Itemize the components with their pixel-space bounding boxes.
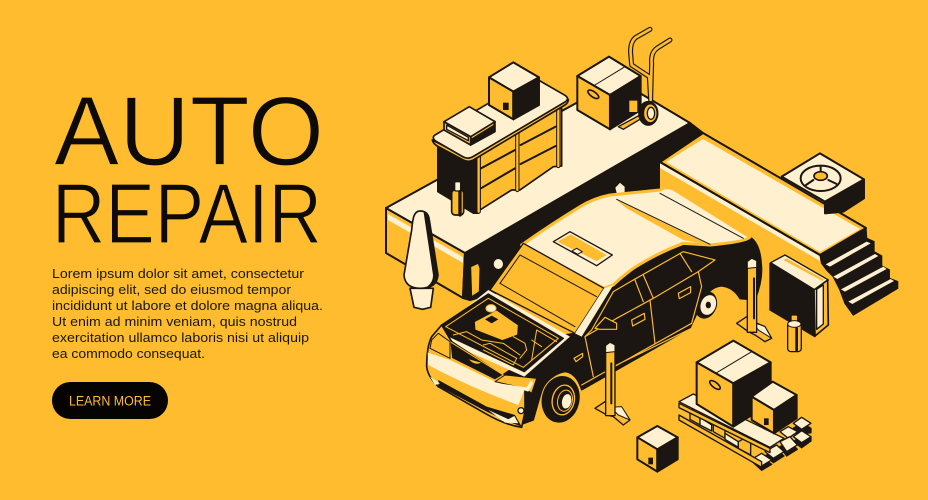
tree xyxy=(404,211,438,309)
body text: Ut enim ad minim veniam, quis nostrud xyxy=(52,314,297,329)
stairs xyxy=(820,228,898,315)
tool cabinet xyxy=(432,62,568,215)
body text: adipiscing elit, sed do eiusmod tempor xyxy=(52,282,292,297)
main workshop platform xyxy=(386,80,720,300)
side windows and door lines xyxy=(574,252,715,385)
sunroof xyxy=(553,232,612,266)
rear spoiler xyxy=(617,193,743,245)
roof xyxy=(522,188,750,288)
button: learn more: LEARN MORE xyxy=(69,394,151,408)
lower right platform xyxy=(660,133,866,313)
body text: Lorem ipsum dolor sit amet, consectetur xyxy=(52,266,305,281)
front fascia xyxy=(427,325,537,427)
small box xyxy=(752,382,797,433)
title: REPAIR xyxy=(52,167,322,262)
title xyxy=(52,76,324,262)
pallet xyxy=(679,394,811,470)
locker cabinet xyxy=(770,255,828,337)
gas cylinder xyxy=(788,315,801,352)
title: AUTO xyxy=(54,76,324,186)
engine bay xyxy=(438,290,570,377)
windshield xyxy=(490,243,604,333)
cream pillar xyxy=(575,285,613,337)
floor box xyxy=(637,426,678,472)
car body xyxy=(500,237,762,425)
car xyxy=(427,188,762,427)
button: learn more xyxy=(52,382,168,419)
pallet with boxes xyxy=(679,341,811,470)
body text: ea commodo consequat. xyxy=(52,346,205,361)
big box xyxy=(697,341,771,427)
rear wheel xyxy=(691,288,721,322)
body text xyxy=(52,266,323,361)
small parts behind car xyxy=(471,259,503,297)
body text: exercitation ullamco laboris nisi ut aliquip xyxy=(52,330,309,345)
rear lift post xyxy=(737,258,772,342)
front wheel xyxy=(537,372,585,427)
small bracket behind car xyxy=(615,182,625,197)
hand truck and box xyxy=(577,29,670,129)
front lift post xyxy=(595,342,630,425)
body text: incididunt ut labore et dolore magna aliqua. xyxy=(52,298,323,313)
fan unit xyxy=(782,153,864,213)
